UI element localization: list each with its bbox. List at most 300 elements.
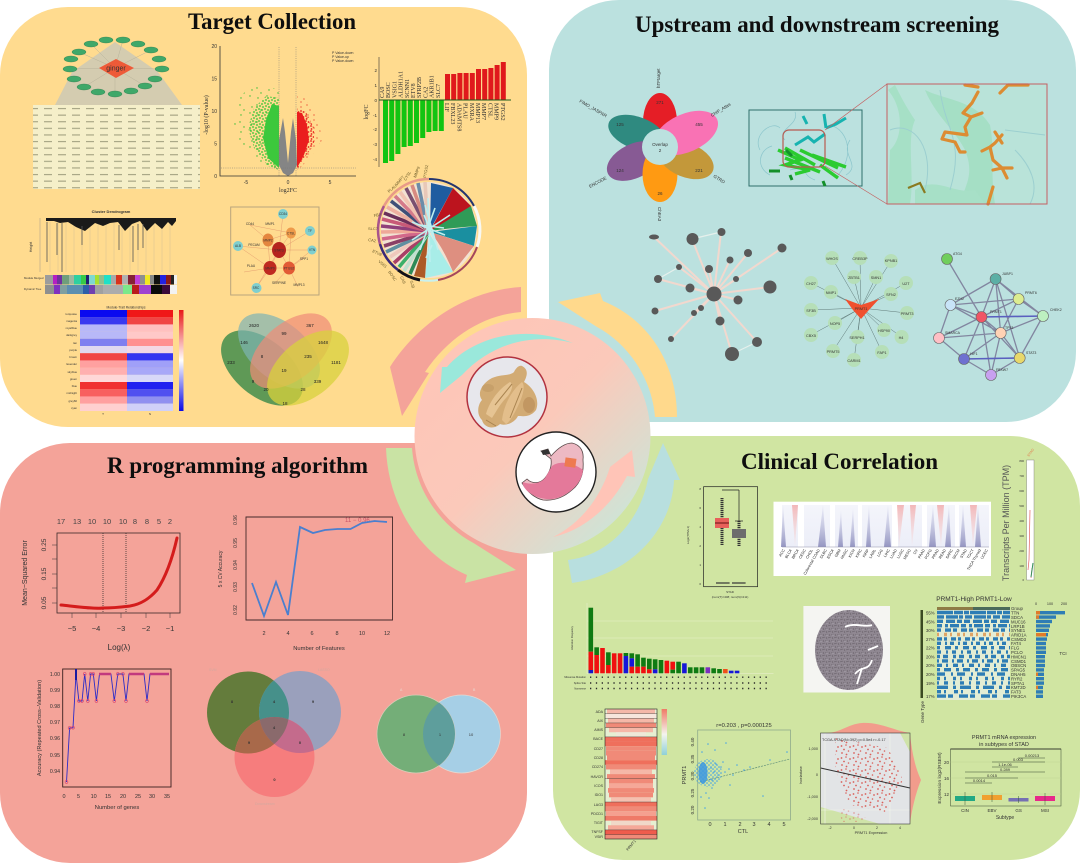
logFC bar chart: CA9 <box>380 87 386 98</box>
volcano plot: 20 <box>211 44 217 50</box>
pan-cancer expression profile: SKCM <box>952 548 961 560</box>
expression box plot: 2 <box>699 544 701 548</box>
repeated cross-validation accuracy plot: 0 <box>62 794 66 800</box>
oncoplot: 22% <box>926 646 935 650</box>
cross-validation accuracy plot: 0.94 <box>233 560 239 570</box>
subtype box plots: 20 <box>944 760 949 765</box>
logFC bar chart: PTGS2 <box>499 103 505 121</box>
PRMT1 star network: H4 <box>899 336 903 340</box>
oncoplot: SPTA1 <box>1011 681 1025 686</box>
chord diagram: FBX <box>373 212 382 218</box>
STRING interaction network: PRMT1 <box>990 310 1002 314</box>
protein interaction network: PLAU <box>247 264 256 268</box>
oncoplot: Gene Type <box>920 701 925 723</box>
transcripts per million plot <box>1001 447 1035 582</box>
central disc <box>386 287 680 583</box>
arrow: green, algorithm flow <box>386 448 516 583</box>
transcripts per million plot: 600 <box>1019 489 1024 493</box>
STRING interaction network: JUBP1 <box>1002 272 1013 276</box>
six-petal flower Venn: FIMO_JASPAR <box>578 99 608 119</box>
expression box plot <box>686 487 758 599</box>
LASSO error plot: −4 <box>92 624 100 633</box>
oncoplot: 19% <box>926 681 935 686</box>
immune checkpoint heat rows: ICOS <box>594 784 604 788</box>
logFC bar chart: ALDH1A1 <box>398 71 404 98</box>
pan-cancer expression profile: BRCA <box>791 548 800 560</box>
pan-cancer expression profile: PCPG <box>924 548 933 560</box>
STRING interaction network: PRMT6 <box>1025 291 1037 295</box>
repeated cross-validation accuracy plot: 5 <box>77 794 80 800</box>
CTL scatter plot: 0.35 <box>690 754 695 763</box>
three-set Venn diagram: 0 <box>273 777 276 782</box>
PRMT1 star network: ZBTB1 <box>848 276 860 280</box>
expression scatter with marginal histograms <box>799 723 921 835</box>
oncoplot: TTN <box>1011 610 1019 616</box>
LASSO error plot: 5 <box>157 517 161 526</box>
PRMT1 star network: CREB3P <box>852 257 868 261</box>
expression box plot: 4 <box>699 525 701 529</box>
six-petal flower Venn: 221 <box>695 168 703 173</box>
transcripts per million plot: 0 <box>1022 578 1024 582</box>
repeated cross-validation accuracy plot: 0.97 <box>50 720 60 726</box>
STRING interaction network: HIF1 <box>970 352 978 356</box>
volcano plot: 10 <box>211 109 217 115</box>
icon: ginger photo <box>467 357 547 437</box>
volcano plot: 0 <box>214 174 217 180</box>
expression scatter with marginal histograms: -2 <box>828 826 832 830</box>
three-set Venn diagram <box>207 668 341 806</box>
CTL scatter plot: CTL <box>738 829 748 835</box>
expression scatter with marginal histograms: PRMT1 Expression <box>855 831 887 835</box>
transcripts per million plot: Transcripts Per Million (TPM) <box>1001 465 1011 581</box>
heading: upstream and downstream screening: Upstream and downstream screening <box>635 12 999 37</box>
module-trait heatmap: magenta <box>66 319 77 323</box>
chord diagram: SLC7 <box>368 226 379 231</box>
LASSO error plot: −5 <box>68 624 76 633</box>
immune checkpoint heat rows: VSIR <box>595 835 603 839</box>
logFC bar chart: 1 <box>374 83 377 88</box>
expression scatter with marginal histograms: Isoelastase <box>799 766 803 784</box>
expression scatter with marginal histograms: -1,000 <box>807 795 818 799</box>
LASSO error plot: 8 <box>145 517 149 526</box>
logFC bar chart: LIF <box>443 103 449 113</box>
subtype box plots: EBV <box>987 808 997 813</box>
mutation frequency stacked bars: Missense Mutation <box>564 675 587 679</box>
cross-validation accuracy plot: 0.96 <box>233 515 239 525</box>
oncoplot: 0 <box>1035 602 1037 606</box>
arrow: yellow, upstream flow <box>558 293 677 417</box>
two-set Venn diagram <box>377 688 500 773</box>
PRMT1 star network: CH27 <box>806 282 816 286</box>
immune checkpoint heat rows: AIX <box>597 719 604 723</box>
STRING interaction network: CHEK2 <box>1050 308 1062 312</box>
mutation frequency stacked bars: Alteration Frequency <box>570 625 574 650</box>
oncoplot: RYR2 <box>1011 676 1023 682</box>
immune checkpoint heat rows: CD274 <box>592 765 603 769</box>
docking overview with zoom lines <box>749 84 887 204</box>
repeated cross-validation accuracy plot: 20 <box>120 794 126 800</box>
subtype box plots: 0.003 <box>1013 757 1024 762</box>
three-set Venn diagram: SVM <box>209 668 217 672</box>
six-petal flower Venn: 26 <box>657 191 663 196</box>
module-trait heatmap: midnight <box>66 391 77 395</box>
subtype box plots: 16 <box>944 776 949 781</box>
volcano plot: log2FC <box>279 188 297 194</box>
expression scatter with marginal histograms: 0 <box>853 826 855 830</box>
WGCNA cluster dendrogram: Module Merged <box>24 276 44 280</box>
module-trait heatmap: Module-Trait Relationships <box>106 306 146 310</box>
four-set Venn diagram: 20 <box>263 387 269 392</box>
three-set Venn diagram: LASSO <box>318 668 330 672</box>
oncoplot: 20% <box>926 663 935 668</box>
pan-cancer expression profile: LIHC <box>883 548 891 558</box>
oncoplot: FAT4 <box>1011 641 1022 646</box>
expression scatter with marginal histograms: 1,000 <box>808 747 818 751</box>
six-petal flower Venn: ChEA3 <box>657 207 662 222</box>
volcano plot: P Value-down <box>332 59 354 63</box>
oncoplot: KMT2D <box>1011 685 1026 690</box>
oncoplot: SPAG5 <box>1011 668 1026 672</box>
oncoplot: 27% <box>926 637 935 642</box>
PRMT1 star network: CBX5 <box>806 334 816 338</box>
pan-cancer expression profile: HNSC <box>840 548 849 560</box>
four-set Venn diagram: 146 <box>240 340 248 345</box>
oncoplot: 20% <box>926 672 935 677</box>
repeated cross-validation accuracy plot: Accuracy (Repeated Cross−Validation) <box>37 680 43 776</box>
module-trait heatmap: brown <box>69 355 77 359</box>
logFC bar chart <box>364 57 511 167</box>
subtype box plots: in subtypes of STAD <box>979 742 1029 748</box>
chord diagram: MMP7 <box>394 174 406 187</box>
PRMT1 star network: FAP1 <box>877 351 887 355</box>
logFC bar chart: PLAU <box>462 103 468 119</box>
chord diagram: CA2 <box>368 237 377 243</box>
logFC bar chart: ETV8 <box>411 83 417 98</box>
logFC bar chart: ADAMTS8 <box>456 103 462 131</box>
module-trait heatmap: purple <box>69 348 77 352</box>
three-set Venn diagram: 8 <box>231 699 234 704</box>
PRMT1 star network: HSP90 <box>878 329 890 333</box>
two-set Venn diagram: 1 <box>439 732 442 737</box>
LASSO error plot: 0.15 <box>41 567 48 580</box>
PRMT1 star network: PRMT5 <box>827 350 839 354</box>
six-petal flower Venn: 2 <box>659 148 662 153</box>
LASSO error plot: −3 <box>117 624 125 633</box>
LASSO error plot: 13 <box>73 517 81 526</box>
STRING interaction network <box>934 252 1062 380</box>
transcripts per million plot: 200 <box>1019 549 1024 553</box>
arrow: mint, inner disc <box>440 334 573 393</box>
chord diagram: BOSC <box>387 270 398 282</box>
pan-cancer expression profile: PAAD <box>917 548 926 559</box>
LASSO error plot: 2 <box>168 517 172 526</box>
logFC bar chart: SFRP2B <box>417 77 423 98</box>
heading: target collection: Target Collection <box>188 9 356 34</box>
six-petal flower Venn: ChIP_Atlas <box>710 101 732 118</box>
CTL scatter plot: 4 <box>767 822 771 828</box>
protein interaction network: STAT3 <box>274 248 284 252</box>
module-trait heatmap: grey60 <box>68 399 77 403</box>
repeated cross-validation accuracy plot: 15 <box>105 794 111 800</box>
six-petal flower Venn: 271 <box>656 100 664 105</box>
oncoplot: DNAH5 <box>1011 672 1026 677</box>
cross-validation accuracy plot <box>218 515 392 652</box>
STRING interaction network: EZH2 <box>955 297 964 301</box>
transcripts per million plot: 100 <box>1019 564 1024 568</box>
STRING interaction network: ATG4 <box>953 252 962 256</box>
immune checkpoint heat rows: ADA <box>596 710 604 714</box>
LASSO error plot <box>22 517 180 652</box>
chord diagram: ETV8 <box>372 248 383 257</box>
immune checkpoint heat rows: AIMS <box>594 728 604 732</box>
oncoplot: 100 <box>1047 602 1053 606</box>
cross-validation accuracy plot: 0.93 <box>233 582 239 592</box>
logFC bar chart: MXRA <box>468 103 474 122</box>
repeated cross-validation accuracy plot: 0.99 <box>50 688 60 694</box>
immune checkpoint heat rows: HAVCR <box>591 775 603 779</box>
module-trait heatmap: royalblue <box>66 326 77 330</box>
logFC bar chart: 2 <box>374 68 377 73</box>
protein interaction network: SPP1 <box>300 257 308 261</box>
logFC bar chart: BOSC <box>386 82 392 98</box>
six-petal flower Venn: GTRD <box>712 174 727 185</box>
repeated cross-validation accuracy plot: 0.98 <box>50 704 60 710</box>
LASSO error plot: 17 <box>57 517 65 526</box>
chord diagram <box>368 164 480 289</box>
four-set Venn diagram: 1181 <box>331 360 341 365</box>
expression box plot: 6 <box>699 506 701 510</box>
repeated cross-validation accuracy plot: 10 <box>91 794 97 800</box>
pan-cancer expression profile: CESC <box>798 548 807 560</box>
PRMT1 star network: SF3B <box>806 309 816 313</box>
six-petal flower Venn: Overlap <box>652 142 668 147</box>
chord diagram: GJB <box>409 280 416 289</box>
logFC bar chart: -3 <box>373 142 377 147</box>
four-set Venn diagram: 367 <box>306 323 314 328</box>
PRMT1 star network: PRMT1 <box>855 307 867 311</box>
pan-cancer expression profile: SARC <box>945 548 954 560</box>
heading: clinical correlation: Clinical Correlation <box>741 449 938 474</box>
transcripts per million plot: STAD <box>1027 447 1035 458</box>
four-set Venn diagram: 235 <box>304 354 312 359</box>
four-set Venn diagram: 339 <box>314 379 322 384</box>
four-set Venn diagram: 2620 <box>249 323 260 328</box>
logFC bar chart: logFC <box>364 104 370 120</box>
module-trait heatmap: blue <box>72 384 77 388</box>
panel: R programming algorithm <box>0 443 527 863</box>
transcripts per million plot: 300 <box>1019 534 1024 538</box>
immune checkpoint heat rows: CD28 <box>594 756 603 760</box>
oncoplot: CSMD1 <box>1011 659 1027 664</box>
expression scatter with marginal histograms: TCGA-STAD(N=392) p=0.5e4 r=-0.17 <box>822 738 886 742</box>
immune checkpoint heat rows: TNFSF <box>591 830 604 834</box>
subtype box plots: Subtype <box>996 815 1014 821</box>
four-set Venn diagram: 233 <box>227 360 235 365</box>
subtype box plots: GS <box>1015 808 1022 813</box>
logFC bar chart: MMP13 <box>474 103 480 123</box>
module-trait heatmap: skyblue <box>68 370 77 374</box>
cross-validation accuracy plot: 11 − 0.96 <box>345 518 370 524</box>
expression scatter with marginal histograms: -2,000 <box>807 817 818 821</box>
module-trait heatmap: lavender <box>66 362 77 366</box>
module-trait heatmap: turquoise <box>65 312 77 316</box>
docking close-up <box>887 84 1047 204</box>
oncoplot: SDCA <box>1011 615 1023 620</box>
CTL scatter plot: 0.20 <box>690 805 695 814</box>
mutation frequency stacked bars: Splice Site <box>574 681 587 685</box>
LASSO error plot: −2 <box>142 624 150 633</box>
pan-cancer expression profile: LUAD <box>889 548 898 559</box>
protein interaction network: ALB <box>235 244 241 248</box>
chord diagram: CTSL <box>403 169 412 182</box>
oncoplot: 30% <box>926 628 935 633</box>
pan-cancer expression profile: GBM <box>834 548 842 558</box>
protein interaction network: PTGS2 <box>284 266 294 270</box>
cross-validation accuracy plot: 0.92 <box>233 605 239 615</box>
CTL scatter plot: 1 <box>723 822 727 828</box>
logFC bar chart: FBXL23 <box>449 103 455 124</box>
oncoplot: 55% <box>926 610 935 616</box>
expression box plot: STAD <box>726 590 735 594</box>
expression scatter with marginal histograms: 4 <box>899 826 901 830</box>
oncoplot: LRP1B <box>1011 624 1025 629</box>
STRING interaction network: FBXW7 <box>996 368 1008 372</box>
PRMT1 star network: U2T <box>902 282 910 286</box>
protein interaction network: MMP13 <box>294 283 305 287</box>
chord diagram: MMP9 <box>412 165 421 178</box>
pan-cancer expression profile: LGG <box>876 548 884 557</box>
panel: upstream and downstream screening <box>549 0 1076 422</box>
protein interaction network: CD44 <box>246 222 254 226</box>
transcripts per million plot: 700 <box>1019 474 1024 478</box>
three-set Venn diagram: 0 <box>299 740 302 745</box>
immune checkpoint heat rows: PRMT1 <box>626 839 637 852</box>
CTL scatter plot: 0.25 <box>690 788 695 797</box>
pan-cancer expression profile <box>774 502 991 576</box>
CTL scatter plot: 3 <box>752 822 756 828</box>
PRMT1 star network: WHOS <box>826 257 838 261</box>
logFC bar chart: CTSL <box>486 103 492 118</box>
WGCNA cluster dendrogram: Cluster Dendrogram <box>92 209 131 214</box>
pan-cancer expression profile: KICH <box>848 548 856 558</box>
subtype box plots: 0.289 <box>1000 767 1011 772</box>
immune checkpoint heat rows: IDO1 <box>595 793 603 797</box>
protein interaction network: CD34 <box>279 212 287 216</box>
transcripts per million plot: 500 <box>1019 504 1024 508</box>
subtype box plots: CIN <box>961 808 969 813</box>
subtype box plots: 12 <box>944 792 949 797</box>
oncoplot: 200 <box>1061 602 1067 606</box>
oncoplot: SYNE1 <box>1011 628 1026 633</box>
CTL scatter plot: r=0.203 , p=0.000125 <box>716 723 772 729</box>
PRMT1 star network: CARM1 <box>847 359 861 363</box>
immune checkpoint heat rows: BACE <box>593 737 604 741</box>
three-set Venn diagram: 4 <box>273 699 276 704</box>
CTL scatter plot: 0.40 <box>690 737 695 746</box>
LASSO error plot: 0.05 <box>41 596 48 609</box>
expression scatter with marginal histograms: 0 <box>816 773 818 777</box>
protein interaction network <box>231 207 319 295</box>
repeated cross-validation accuracy plot: 0.96 <box>50 736 60 742</box>
CTL scatter plot: 0 <box>708 822 712 828</box>
expression box plot: 0 <box>699 582 701 586</box>
oncoplot: PIK3CA <box>1011 694 1026 699</box>
subtype box plots: Expression log2(RSEM) <box>937 752 943 804</box>
panel: clinical correlation <box>553 436 1080 860</box>
module-trait heatmap: T <box>102 412 104 416</box>
PRMT1 star network: KPNB1 <box>885 259 897 263</box>
ginger compound-target network <box>55 37 182 105</box>
cross-validation accuracy plot: 5 x CV Accuracy <box>218 550 224 587</box>
immune checkpoint heat rows <box>591 709 667 852</box>
STRING interaction network: SMARCA <box>945 331 961 335</box>
CTL scatter plot: 2 <box>738 822 742 828</box>
cross-validation accuracy plot: 2 <box>262 631 266 637</box>
repeated cross-validation accuracy plot: 35 <box>164 794 170 800</box>
cross-validation accuracy plot: 10 <box>359 631 365 637</box>
pan-cancer expression profile: THCA Thyroid <box>967 548 982 571</box>
compound table <box>33 105 200 189</box>
subtype box plots: 0.00213 <box>1025 753 1040 758</box>
pan-cancer expression profile: MESO <box>903 548 912 560</box>
subtype box plots <box>937 735 1061 821</box>
protein interaction network: MMP9 <box>265 266 275 270</box>
expression scatter with marginal histograms: 2 <box>876 826 878 830</box>
two-set Venn diagram: B <box>473 688 476 692</box>
logFC bar chart: -2 <box>373 127 377 132</box>
heading: R programming algorithm: R programming algorithm <box>107 453 368 478</box>
oncoplot: FLG <box>1011 646 1020 650</box>
immune checkpoint heat rows: PDCD1 <box>591 812 603 816</box>
module-trait heatmap <box>65 306 184 416</box>
LASSO error plot: Log(λ) <box>108 643 131 652</box>
module-trait heatmap: darkgrey <box>66 333 78 337</box>
logFC bar chart: -4 <box>373 157 377 162</box>
volcano plot: P Value-up <box>332 55 349 59</box>
pan-cancer expression profile: LAML <box>868 548 877 559</box>
protein interaction network: PECAM <box>248 243 260 247</box>
two-set Venn diagram: 10 <box>469 732 474 737</box>
pan-cancer expression profile: ACC <box>778 548 786 557</box>
oncoplot: 20% <box>926 654 935 660</box>
protein interaction network: MMP1 <box>265 222 275 226</box>
icon: stomach illustration <box>516 432 596 512</box>
PRMT1 star network: SMN1 <box>871 276 881 280</box>
volcano plot: P Value-down <box>332 51 354 55</box>
logFC bar chart: VSIG1 <box>392 81 398 98</box>
six-petal flower Venn: 124 <box>616 168 624 173</box>
LASSO error plot: 10 <box>119 517 127 526</box>
module-trait heatmap: green <box>70 377 77 381</box>
protein interaction network: SRC <box>253 286 260 290</box>
protein interaction network: TF <box>308 229 312 233</box>
cross-validation accuracy plot: Number of Features <box>293 646 345 652</box>
oncoplot: Group <box>1011 606 1024 611</box>
volcano plot: -log10 (P-value) <box>203 95 210 135</box>
oncoplot: OBSCN <box>1011 663 1026 668</box>
oncoplot: 17% <box>926 694 935 699</box>
volcano plot: 15 <box>211 76 217 82</box>
four-set Venn diagram: 9 <box>252 379 255 384</box>
subtype box plots: 1.1e-06 <box>998 762 1013 767</box>
repeated cross-validation accuracy plot: 0.95 <box>50 753 60 759</box>
logFC bar chart: 0 <box>374 98 377 103</box>
PRMT1 star network: SERPH1 <box>849 336 865 340</box>
PRMT1 star network: SFN2 <box>886 293 896 297</box>
oncoplot <box>920 596 1067 723</box>
cross-validation accuracy plot: 0.95 <box>233 538 239 548</box>
pan-cancer expression profile: OV <box>913 548 919 555</box>
